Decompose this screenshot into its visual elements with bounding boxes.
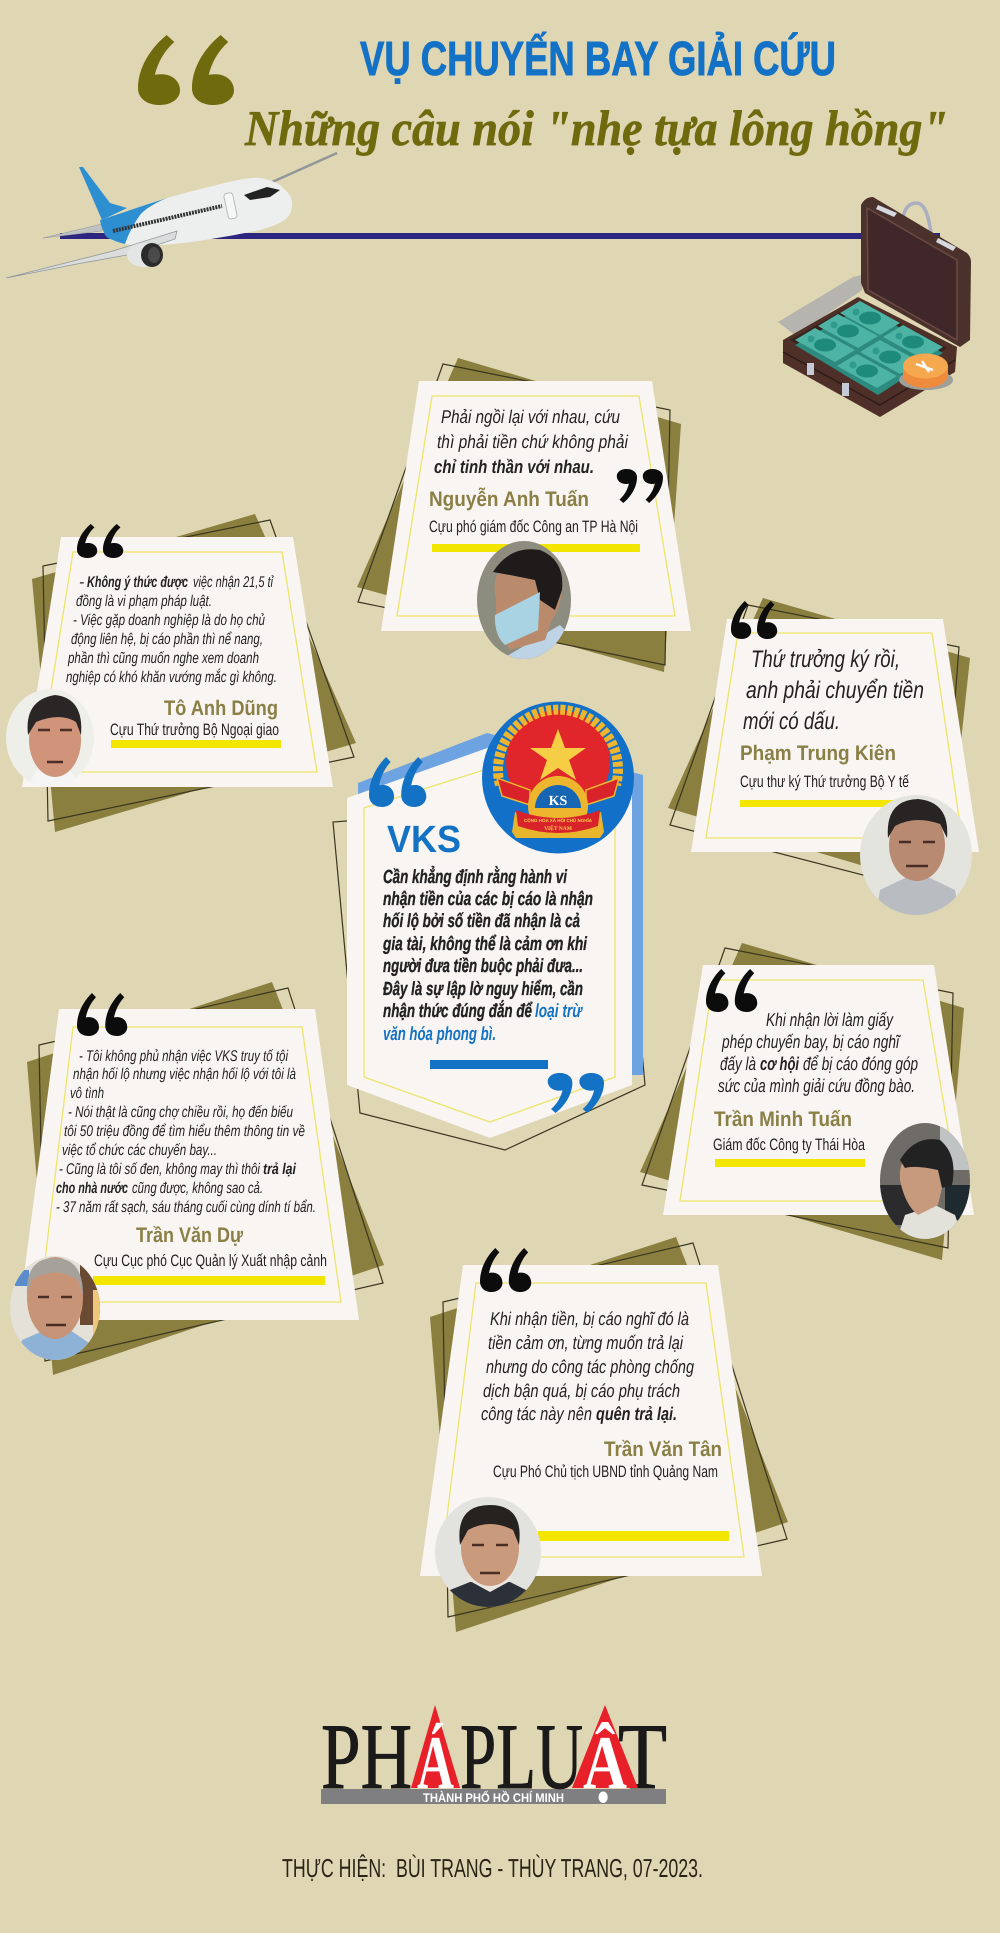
icon: briefcase with money bbox=[778, 197, 971, 417]
speaker role: Cựu Thứ trưởng Bộ Ngoại giao bbox=[110, 721, 279, 739]
quote text: - Tôi không phủ nhận việc VKS truy tố tội bbox=[79, 1048, 288, 1065]
subtitle: Những câu nói "nhẹ tựa lông hồng" bbox=[244, 100, 948, 156]
header quote mark bbox=[138, 35, 234, 105]
icon: procuracy emblem: VIỆT NAM bbox=[544, 825, 573, 832]
speaker role: Cựu thư ký Thứ trưởng Bộ Y tế bbox=[740, 773, 909, 791]
quote text: dịch bận quá, bị cáo phụ trách bbox=[483, 1380, 680, 1401]
closing quote mark bbox=[617, 469, 663, 503]
photo: Trần Văn Dự bbox=[10, 1256, 100, 1360]
logo: Pháp Luật: THÀNH PHỐ HỒ CHÍ MINH bbox=[423, 1790, 564, 1805]
statement text: văn hóa phong bì. bbox=[383, 1024, 496, 1045]
statement text: Cần khẳng định rằng hành vi bbox=[383, 865, 568, 888]
quote text: cho nhà nước bbox=[56, 1180, 128, 1197]
photo: Phạm Trung Kiên bbox=[860, 795, 972, 915]
quote text: nghiệp có khó khăn vướng mắc gì không. bbox=[66, 668, 277, 686]
quote text: việc nhận 21,5 tỉ bbox=[193, 574, 274, 591]
speaker role: Cựu phó giám đốc Công an TP Hà Nội bbox=[429, 518, 638, 536]
logo: Pháp Luật bbox=[321, 1705, 667, 1809]
opening quote mark bbox=[731, 601, 777, 639]
quote text: tôi 50 triệu đồng để tìm hiểu thêm thông tin về bbox=[64, 1123, 305, 1140]
speaker name: Nguyễn Anh Tuấn bbox=[429, 487, 589, 511]
VKS heading: VKS bbox=[387, 819, 461, 861]
quote text bbox=[66, 574, 277, 686]
quote text: vô tình bbox=[70, 1085, 104, 1102]
quote text: phép chuyến bay, bị cáo nghĩ bbox=[721, 1031, 901, 1052]
panel: VKS statement bbox=[333, 702, 645, 1150]
quote text: anh phải chuyển tiền bbox=[746, 677, 924, 704]
quote text: sức của mình giải cứu đồng bào. bbox=[718, 1075, 915, 1096]
speaker name: Trần Văn Dự bbox=[136, 1224, 244, 1247]
speaker name: Tô Anh Dũng bbox=[164, 697, 278, 720]
quote text: - Việc gặp doanh nghiệp là do họ chủ bbox=[73, 612, 265, 629]
quote text: cũng được, không sao cả. bbox=[132, 1180, 263, 1197]
statement text: hối lộ bởi số tiền đã nhận là cả bbox=[383, 911, 580, 932]
quote text: thì phải tiền chứ không phải bbox=[437, 431, 629, 452]
quote text: chỉ tinh thần với nhau. bbox=[434, 456, 594, 477]
quote text: - Cũng là tôi số đen, không may thì thôi bbox=[59, 1161, 260, 1178]
photo: Trần Minh Tuấn bbox=[880, 1123, 970, 1239]
icon: procuracy emblem: CỘNG HÒA XÃ HỘI CHỦ NGHĨA bbox=[524, 817, 593, 823]
quote text bbox=[481, 1308, 695, 1424]
logo: Pháp Luật: T bbox=[618, 1705, 667, 1809]
statement text bbox=[382, 865, 593, 1045]
quote text: mới có dấu. bbox=[743, 708, 840, 735]
quote text: nhưng do công tác phòng chống bbox=[486, 1356, 695, 1377]
logo: Pháp Luật: PLU bbox=[460, 1705, 583, 1809]
quote text: Không ý thức được bbox=[87, 574, 188, 591]
opening quote mark bbox=[480, 1248, 531, 1292]
opening quote mark bbox=[706, 969, 757, 1012]
quote text: Khi nhận lời làm giấy bbox=[766, 1009, 894, 1030]
logo: Pháp Luật: Á bbox=[417, 1721, 454, 1805]
quote text: đấy là bbox=[720, 1053, 756, 1074]
quote text: để bị cáo đóng góp bbox=[803, 1053, 918, 1074]
photo: Trần Văn Tân bbox=[435, 1497, 541, 1607]
closing quote mark bbox=[548, 1073, 604, 1113]
quote text: tiền cảm ơn, từng muốn trả lại bbox=[488, 1332, 684, 1353]
quote text: đồng là vi phạm pháp luật. bbox=[76, 593, 212, 610]
quote text bbox=[718, 1009, 918, 1096]
photo: Tô Anh Dũng bbox=[6, 689, 94, 781]
credits: THỰC HIỆN: BÙI TRANG - THÙY TRANG, 07-2023. bbox=[282, 1853, 703, 1883]
quote text: cơ hội bbox=[760, 1053, 800, 1074]
panel: Trần Văn Tân bbox=[420, 1237, 788, 1632]
quote text: Thứ trưởng ký rồi, bbox=[751, 646, 900, 673]
speaker name: Trần Minh Tuấn bbox=[714, 1108, 852, 1131]
opening quote mark bbox=[369, 757, 426, 807]
panel: Trần Minh Tuấn bbox=[640, 943, 975, 1260]
flight line bbox=[60, 233, 940, 239]
icon: procuracy emblem bbox=[482, 702, 634, 854]
icon: airplane bbox=[6, 153, 337, 278]
panel: Trần Văn Dự bbox=[5, 982, 384, 1375]
statement text: loại trừ bbox=[535, 1001, 583, 1022]
icon: procuracy emblem: KS bbox=[549, 794, 568, 809]
logo: Pháp Luật: PH bbox=[321, 1705, 412, 1809]
panel: Phạm Trung Kiên bbox=[668, 598, 979, 920]
quote text: công tác này nên bbox=[481, 1403, 592, 1424]
quote text bbox=[56, 1048, 316, 1216]
quote text bbox=[434, 406, 629, 477]
quote text bbox=[743, 646, 924, 735]
quote text: quên trả lại. bbox=[596, 1403, 677, 1424]
statement text: Đây là sự lập lờ nguy hiểm, cần bbox=[383, 979, 583, 1000]
logo: Pháp Luật: Ậ bbox=[583, 1721, 627, 1805]
panel: Tô Anh Dũng bbox=[0, 514, 356, 832]
logo subtitle band bbox=[321, 1789, 666, 1804]
speaker role: Cựu Phó Chủ tịch UBND tỉnh Quảng Nam bbox=[493, 1463, 718, 1481]
money bills bbox=[795, 301, 943, 388]
quote text: - Nói thật là cũng chợ chiều rồi, họ đến biếu bbox=[68, 1104, 293, 1121]
photo: Nguyễn Anh Tuấn bbox=[477, 541, 571, 659]
opening quote mark bbox=[77, 993, 127, 1036]
quote text: việc tổ chức các chuyến bay... bbox=[62, 1142, 217, 1159]
speaker role: Giám đốc Công ty Thái Hòa bbox=[713, 1136, 866, 1154]
statement text: nhận tiền của các bị cáo là nhận bbox=[383, 889, 593, 910]
title: VỤ CHUYẾN BAY GIẢI CỨU bbox=[360, 31, 836, 86]
panel: Nguyễn Anh Tuấn bbox=[357, 358, 691, 672]
statement text: nhận thức đúng đắn để bbox=[383, 1000, 533, 1022]
quote text: - 37 năm rất sạch, sáu tháng cuối cùng dính tí bẩn. bbox=[56, 1199, 316, 1216]
quote text: trả lại bbox=[263, 1161, 297, 1178]
speaker role: Cựu Cục phó Cục Quản lý Xuất nhập cảnh bbox=[94, 1252, 327, 1270]
statement text: gia tài, không thể là cảm ơn khi bbox=[382, 934, 588, 955]
opening quote mark bbox=[77, 524, 123, 558]
quote text: động liên hệ, bị cáo phần thì nể nang, bbox=[71, 631, 263, 648]
speaker name: Phạm Trung Kiên bbox=[740, 742, 896, 765]
quote text: Khi nhận tiền, bị cáo nghĩ đó là bbox=[490, 1308, 689, 1329]
quote text: Phải ngồi lại với nhau, cứu bbox=[441, 406, 620, 427]
quote text: nhận hối lộ nhưng việc nhận hối lộ với tôi là bbox=[73, 1066, 296, 1083]
speaker name: Trần Văn Tân bbox=[604, 1438, 722, 1461]
quote text: - bbox=[79, 574, 84, 591]
statement text: người đưa tiền buộc phải đưa... bbox=[383, 956, 583, 977]
quote text: phần thì cũng muốn nghe xem doanh bbox=[67, 650, 259, 667]
